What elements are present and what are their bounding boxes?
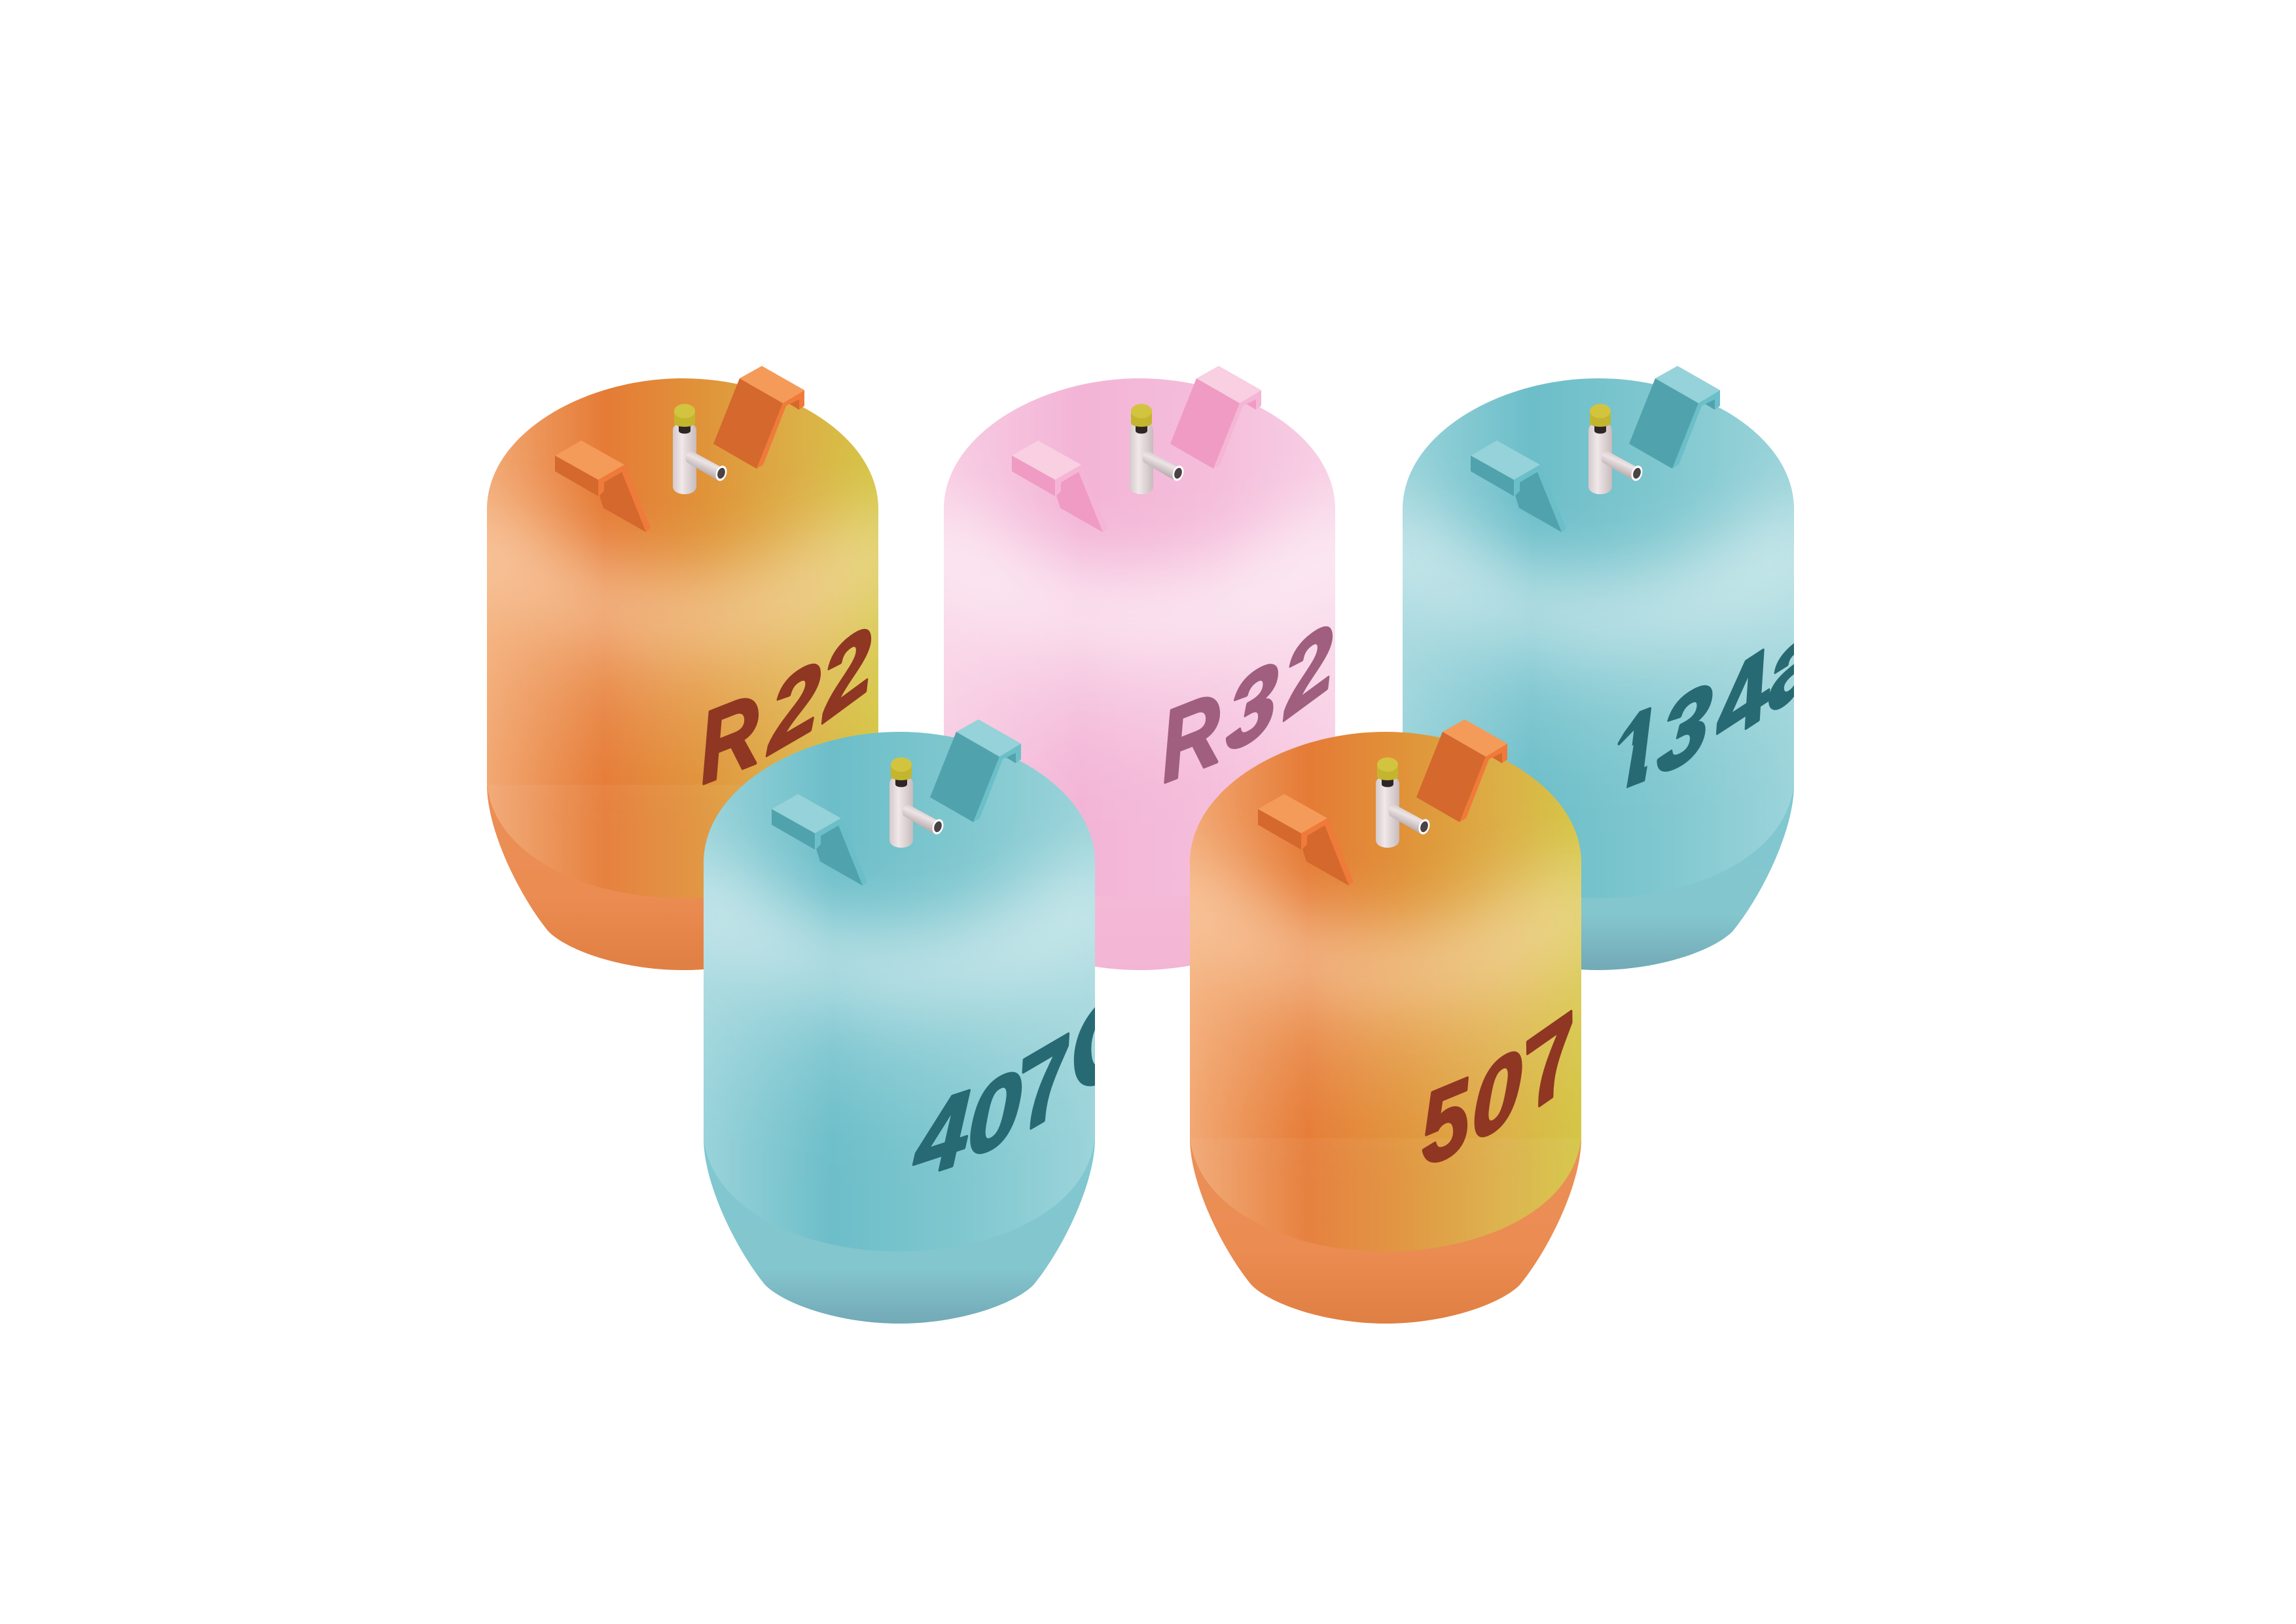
cylinder body xyxy=(487,378,878,970)
label: 507: 7 xyxy=(1516,992,1588,1130)
cylinder: 134a teal xyxy=(1403,366,1794,970)
label: R22: R xyxy=(696,673,763,806)
label: 134a xyxy=(1618,643,1794,788)
label: R32: R xyxy=(1157,672,1225,804)
label: R32: 3 xyxy=(1225,638,1279,776)
label: 407C: 4 xyxy=(911,1068,973,1201)
cylinder body xyxy=(1403,378,1794,970)
label: R32: 2 xyxy=(1279,601,1336,740)
valve xyxy=(1588,404,1644,494)
label: R22 xyxy=(702,628,872,785)
handles xyxy=(1012,366,1261,532)
label: 134a: 1 xyxy=(1607,684,1664,814)
label: 507: 0 xyxy=(1471,1025,1523,1165)
label: 507 xyxy=(1418,992,1588,1188)
cylinder: R22 orange xyxy=(487,366,878,970)
valve xyxy=(889,757,945,848)
label: 407C: 7 xyxy=(1014,1013,1079,1153)
cylinder: 507 orange xyxy=(1163,719,1608,1324)
label: 134a: 4 xyxy=(1708,630,1776,766)
valve xyxy=(673,404,728,494)
cylinder body xyxy=(944,378,1335,970)
label: R22: 2 xyxy=(766,638,821,776)
label: 134a: a xyxy=(1765,593,1823,734)
label: 134a: 3 xyxy=(1654,659,1715,799)
handles xyxy=(1258,719,1507,886)
cylinder body xyxy=(677,732,1150,1324)
cylinder body xyxy=(1163,732,1608,1324)
cylinder: R32 pink xyxy=(944,366,1335,970)
handles xyxy=(1471,366,1720,532)
handles xyxy=(555,366,804,532)
handles xyxy=(772,719,1021,886)
label: 407C xyxy=(911,954,1150,1201)
label: 507: 5 xyxy=(1418,1056,1474,1188)
valve xyxy=(1130,404,1185,494)
label: 407C: C xyxy=(1063,954,1150,1122)
valve xyxy=(1376,757,1431,848)
label: R32 xyxy=(1164,626,1333,784)
cylinder: 407C teal xyxy=(704,719,1095,1324)
label: 407C: 0 xyxy=(966,1047,1023,1180)
label: R22: 2 xyxy=(817,604,874,742)
